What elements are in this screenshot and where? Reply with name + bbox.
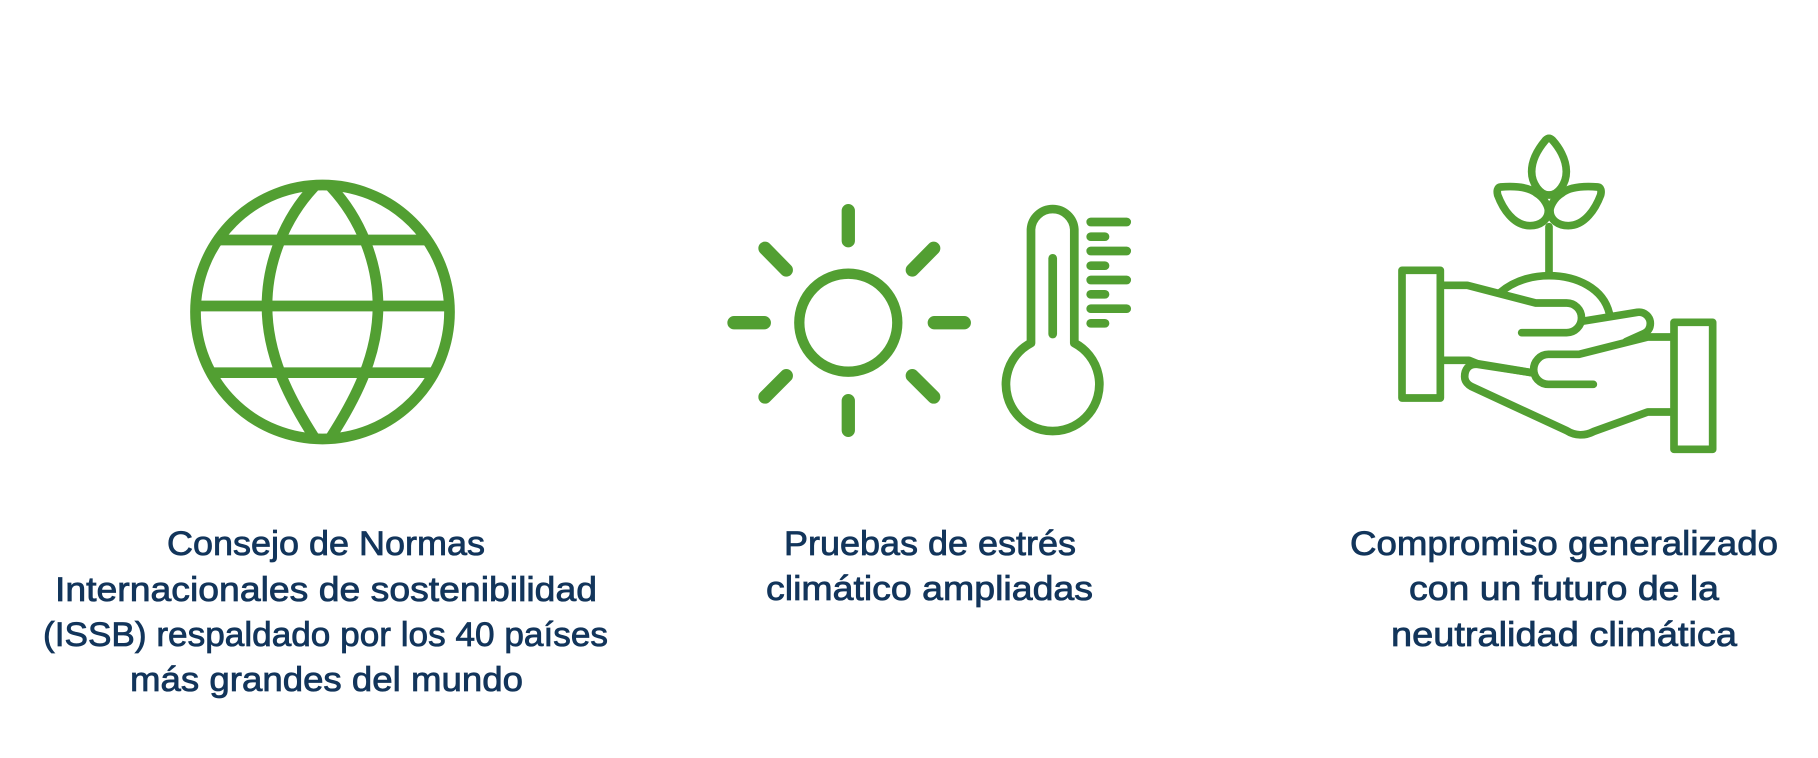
text: ISSB caption: [43, 525, 608, 699]
text: climate neutrality caption: Compromiso generalizado: [1350, 525, 1778, 563]
text: stress tests caption: climático ampliadas: [766, 570, 1093, 608]
icon: thermometer: [1006, 209, 1127, 431]
panel: climate neutrality: [1350, 138, 1778, 654]
icon: globe: [196, 185, 450, 439]
text: ISSB caption: más grandes del mundo: [130, 661, 523, 699]
panel: stress tests: [734, 209, 1127, 608]
icon: sun: [734, 211, 964, 430]
text: ISSB caption: (ISSB) respaldado por los 40 países: [43, 616, 608, 654]
text: climate neutrality caption: neutralidad climática: [1391, 616, 1737, 654]
text: climate neutrality caption: [1350, 525, 1778, 654]
text: ISSB caption: Consejo de Normas: [167, 525, 485, 563]
panel: ISSB: [43, 185, 608, 699]
icon: hands holding plant: [1402, 138, 1713, 449]
text: stress tests caption: [766, 525, 1093, 608]
text: ISSB caption: Internacionales de sostenibilidad: [55, 571, 597, 609]
text: climate neutrality caption: con un futuro de la: [1409, 570, 1719, 608]
text: stress tests caption: Pruebas de estrés: [784, 525, 1076, 563]
